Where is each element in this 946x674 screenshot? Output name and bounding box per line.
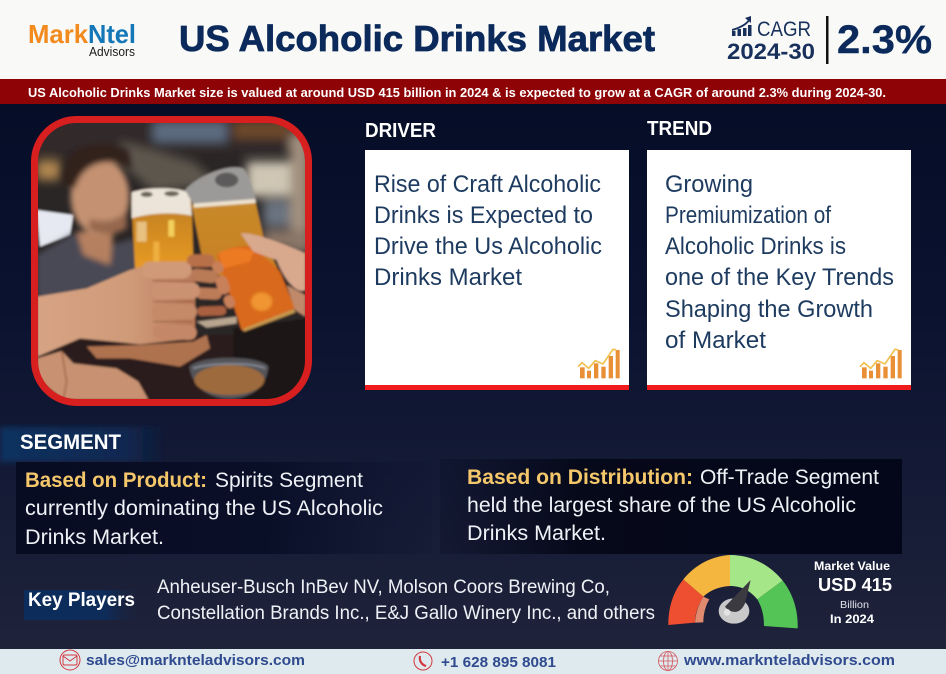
driver text — [374, 171, 602, 291]
heading: driver: DRIVER — [365, 120, 437, 142]
logo: MarkNtel Advisors — [28, 19, 136, 59]
icon: phone — [414, 652, 432, 670]
icon: globe — [658, 652, 678, 670]
photo frame — [34, 120, 308, 402]
white shirt patch — [37, 210, 73, 247]
panel: segment by distribution — [440, 459, 902, 554]
bowl of nuts — [189, 358, 268, 399]
driver text: Drive the Us Alcoholic — [374, 233, 602, 260]
summary banner: US Alcoholic Drinks Market size is valued at around USD 415 billion in 2024 & is expected to grow at a CAGR of around 2.3% during 2024-30. — [28, 86, 886, 100]
panel: segment by product — [16, 462, 432, 554]
lower hands — [37, 335, 210, 400]
market value: USD 415 — [818, 574, 892, 595]
driver text: Drinks Market — [374, 264, 522, 291]
header band — [0, 0, 946, 79]
driver text: Drinks is Expected to — [374, 202, 593, 229]
email address: sales@marknteladvisors.com — [86, 652, 305, 669]
trend text — [665, 171, 894, 354]
trend text: Alcoholic Drinks is — [665, 233, 846, 260]
icon: email — [60, 650, 80, 670]
title: US Alcoholic Drinks Market — [179, 18, 655, 59]
panel: segment by product: currently dominating the US Alcoholic — [25, 496, 383, 520]
left arm and hand — [37, 262, 195, 357]
panel: trend — [647, 150, 911, 390]
trend text: one of the Key Trends — [665, 264, 894, 291]
logo: MarkNtel Advisors: Advisors — [89, 45, 135, 59]
panel: driver — [365, 150, 629, 390]
gauge needle — [719, 580, 751, 624]
heading: segment — [0, 427, 165, 462]
panel: segment by product: Based on Product: — [25, 469, 207, 492]
key players list: Constellation Brands Inc., E&J Gallo Winery Inc., and others — [157, 603, 655, 624]
market value: Billion — [840, 599, 869, 611]
icon: bar chart — [860, 349, 902, 378]
key players list — [157, 577, 655, 624]
market value — [814, 561, 892, 626]
panel: segment by distribution: Based on Distribution: — [467, 466, 693, 489]
footer — [0, 649, 946, 674]
key players label: Key Players — [28, 590, 135, 611]
panel: segment by product: Spirits Segment — [215, 468, 363, 492]
glass right — [185, 167, 295, 332]
market value: Market Value — [814, 561, 890, 573]
panel: segment by distribution: held the largest share of the US Alcoholic — [467, 493, 856, 517]
trend text: Premiumization of — [665, 202, 831, 229]
phone number: +1 628 895 8081 — [441, 654, 556, 671]
CAGR value: 2.3% — [837, 18, 932, 62]
glass bottom — [197, 317, 237, 328]
trend text: Shaping the Growth — [665, 296, 873, 323]
icon: growth chart — [732, 16, 752, 36]
dark bar — [62, 336, 234, 399]
CAGR label: CAGR — [757, 18, 811, 41]
market value: In 2024 — [830, 612, 874, 626]
key players list: Anheuser-Busch InBev NV, Molson Coors Brewing Co, — [157, 577, 610, 598]
panel: segment by distribution: Drinks Market. — [467, 521, 606, 545]
website: www.marknteladvisors.com — [683, 652, 895, 669]
man — [38, 146, 136, 297]
logo: MarkNtel Advisors: Mark — [28, 19, 89, 49]
logo: MarkNtel Advisors: Ntel — [88, 19, 136, 49]
heading: segment: SEGMENT — [20, 431, 121, 454]
CAGR block — [727, 16, 932, 64]
heading: trend: TREND — [647, 118, 712, 140]
CAGR period: 2024-30 — [727, 39, 815, 64]
driver text: Rise of Craft Alcoholic — [374, 171, 601, 198]
trend text: Growing — [665, 171, 753, 198]
icon: bar chart — [578, 349, 620, 378]
summary banner — [0, 79, 946, 104]
glass left — [132, 188, 193, 268]
gauge — [668, 555, 798, 628]
rear hand fingers — [193, 261, 222, 311]
right hand — [241, 233, 305, 291]
trend text: of Market — [665, 327, 766, 354]
panel: segment by product: Drinks Market. — [25, 525, 164, 549]
key players label — [24, 590, 140, 620]
photo: friends toasting beer — [33, 118, 310, 405]
right hand fingers — [217, 267, 230, 303]
panel: segment by distribution: Off-Trade Segment — [700, 465, 879, 489]
